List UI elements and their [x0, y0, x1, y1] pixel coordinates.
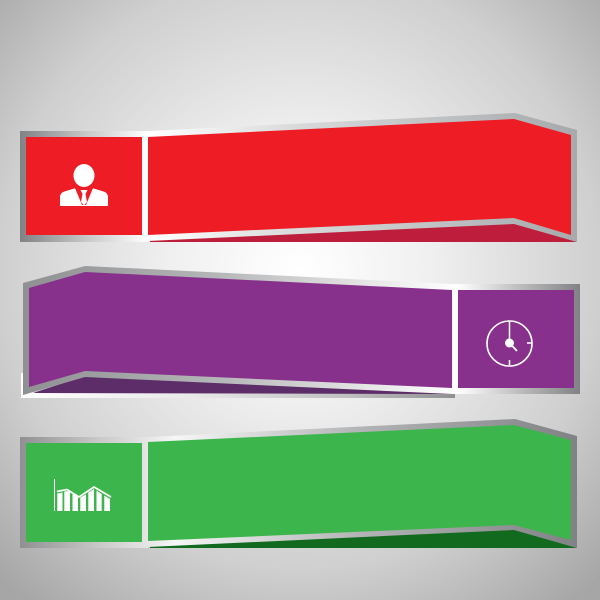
green banner silver frame: [20, 419, 577, 548]
purple banner silver frame: [23, 266, 580, 395]
panel: green banner: [20, 419, 577, 548]
purple main panel: [29, 272, 452, 388]
panel: red banner: [20, 113, 577, 242]
green left box: [26, 443, 142, 542]
panel: purple banner: [21, 266, 580, 398]
icon: clock: [487, 321, 532, 366]
purple bottom strip: [21, 373, 455, 398]
icon: businessman: [60, 164, 108, 206]
red main panel: [148, 119, 571, 235]
red banner silver frame: [20, 113, 577, 242]
green main panel: [148, 425, 571, 541]
purple banner folded shadow: [33, 376, 452, 394]
red banner folded shadow: [150, 222, 577, 242]
green banner folded shadow: [150, 528, 577, 548]
purple right box: [458, 290, 574, 388]
red left box: [26, 137, 142, 235]
icon: bar and line chart: [54, 479, 111, 511]
